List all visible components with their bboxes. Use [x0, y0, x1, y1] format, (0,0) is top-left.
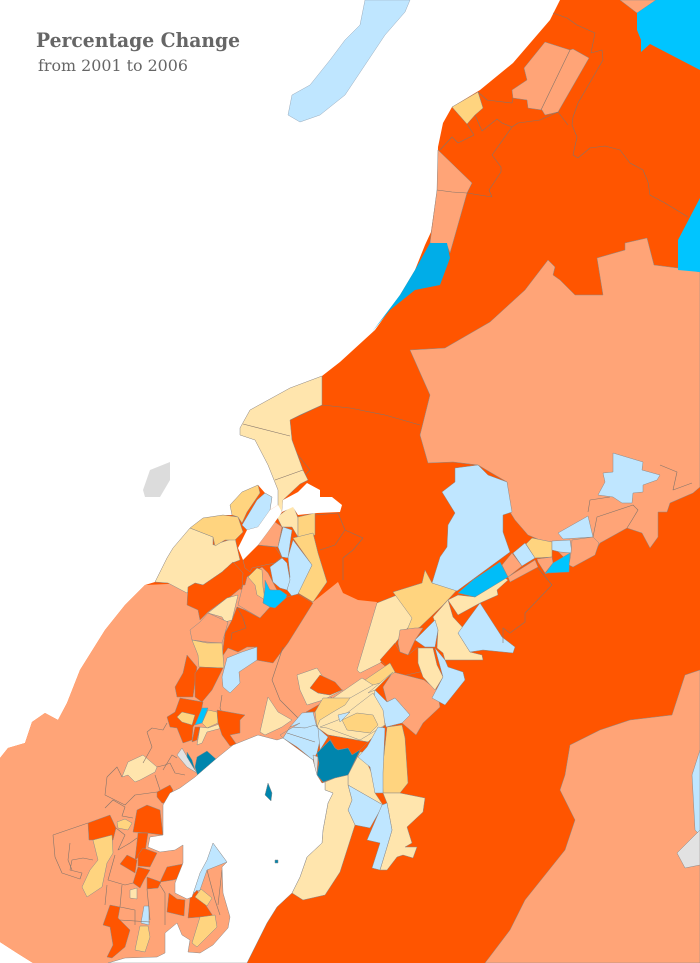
region: far east blue and grey	[677, 750, 700, 868]
subtitle: from 2001 to 2006	[38, 57, 188, 75]
region: western Wellington salmon land	[0, 582, 398, 963]
region: Wellington central suburbs	[53, 698, 245, 958]
title: Percentage Change	[36, 28, 240, 52]
island: Makaro Ward	[275, 860, 278, 863]
region: eastern south salmon land	[485, 670, 700, 963]
region: Kapiti and Porirua north areas	[155, 376, 327, 602]
island: Kapiti Island	[288, 0, 410, 122]
region: northern coast areas	[290, 0, 700, 580]
region: central Wairarapa-side salmon land	[410, 238, 700, 567]
region: Upper Hutt and lake area	[432, 453, 692, 643]
region: Hutt Valley suburbs	[260, 570, 515, 900]
island: Mana Island	[143, 462, 170, 497]
region: Tawa and Johnsonville suburbs	[175, 562, 313, 720]
harbour and inlets	[108, 483, 342, 963]
island: Matiu Somes	[265, 783, 272, 801]
